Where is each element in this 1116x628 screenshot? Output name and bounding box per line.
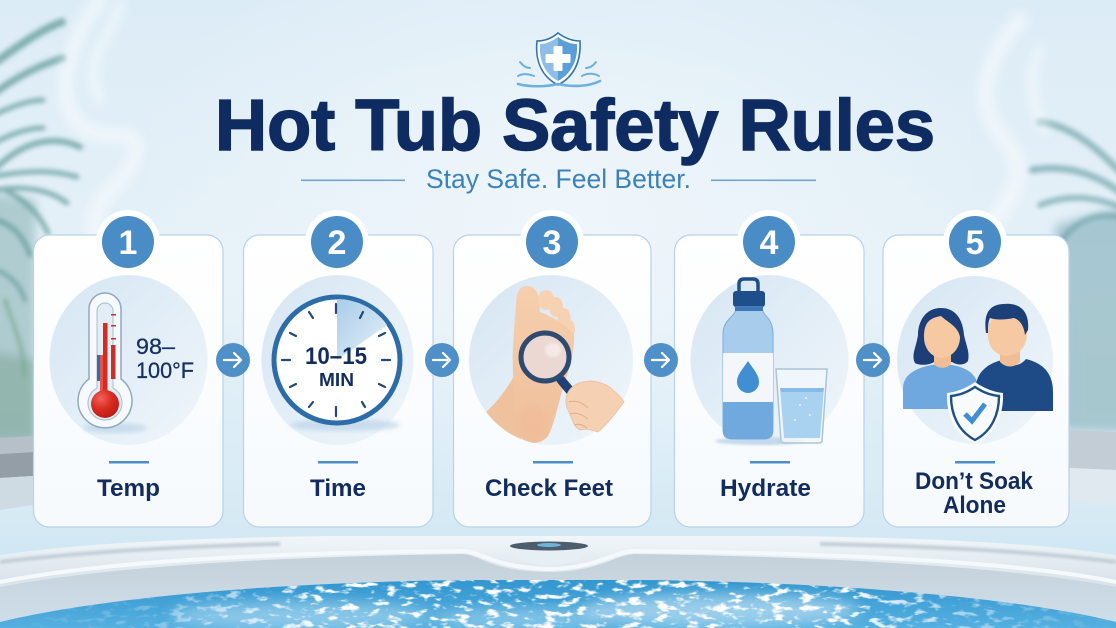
label: hydrate: Hydrate xyxy=(720,475,811,502)
label: temp: Temp xyxy=(97,475,160,502)
step number 5: 5 xyxy=(966,224,984,262)
steam xyxy=(66,0,1045,235)
icon: glass of water xyxy=(776,369,827,443)
right ledge xyxy=(1069,430,1116,470)
temperature value: 98– xyxy=(136,334,175,359)
temperature value: 100°F xyxy=(136,358,194,383)
label: don't soak alone xyxy=(915,468,1034,519)
arrow 4 xyxy=(856,343,890,377)
right bush xyxy=(1055,205,1116,432)
icon: thermometer xyxy=(78,293,147,433)
left ledge xyxy=(0,436,33,454)
right palm foliage xyxy=(1032,122,1116,240)
panel: step 3 check feet xyxy=(454,210,651,527)
panel: step 5 don't soak alone xyxy=(883,210,1069,527)
label: don't soak alone: Don’t Soak xyxy=(915,468,1034,495)
left palm foliage xyxy=(0,22,80,375)
icon: timer showing 10–15 min xyxy=(274,297,400,431)
label: don't soak alone: Alone xyxy=(943,492,1006,519)
step number 2: 2 xyxy=(328,224,346,262)
water xyxy=(0,575,1116,628)
step number 1: 1 xyxy=(119,224,137,262)
title: Hot Tub Safety Rules xyxy=(215,86,935,166)
icon: timer showing 10–15 min: 10–15 xyxy=(305,343,367,370)
arrow 3 xyxy=(644,343,678,377)
step number 3 xyxy=(520,210,584,274)
arrow 2 xyxy=(425,343,459,377)
panel: step 4 hydrate xyxy=(674,210,864,527)
left bush xyxy=(0,190,36,445)
arrow 1 xyxy=(216,343,250,377)
label: check feet: Check Feet xyxy=(485,475,613,502)
label: time: Time xyxy=(310,475,366,502)
panel: step 2 time xyxy=(244,210,433,527)
skimmer xyxy=(510,542,588,565)
subtitle with rules: Stay Safe. Feel Better. xyxy=(426,164,691,194)
icon: timer showing 10–15 min: MIN xyxy=(319,370,354,390)
icon: foot with magnifier and hand xyxy=(484,286,624,445)
temperature value xyxy=(136,334,194,383)
step number 2 xyxy=(305,210,369,274)
header emblem: shield with cross and splash xyxy=(518,33,600,86)
step number 5 xyxy=(943,210,1007,274)
step number 4: 4 xyxy=(760,224,779,262)
step number 3: 3 xyxy=(543,224,561,262)
icon: two people xyxy=(903,304,1053,411)
step number 4 xyxy=(737,210,801,274)
icon: water bottle xyxy=(715,279,805,445)
hot tub rim and water xyxy=(0,536,1116,628)
panel: step 1 temp xyxy=(34,210,223,527)
step number 1 xyxy=(96,210,160,274)
icon: shield with check xyxy=(947,382,1003,444)
